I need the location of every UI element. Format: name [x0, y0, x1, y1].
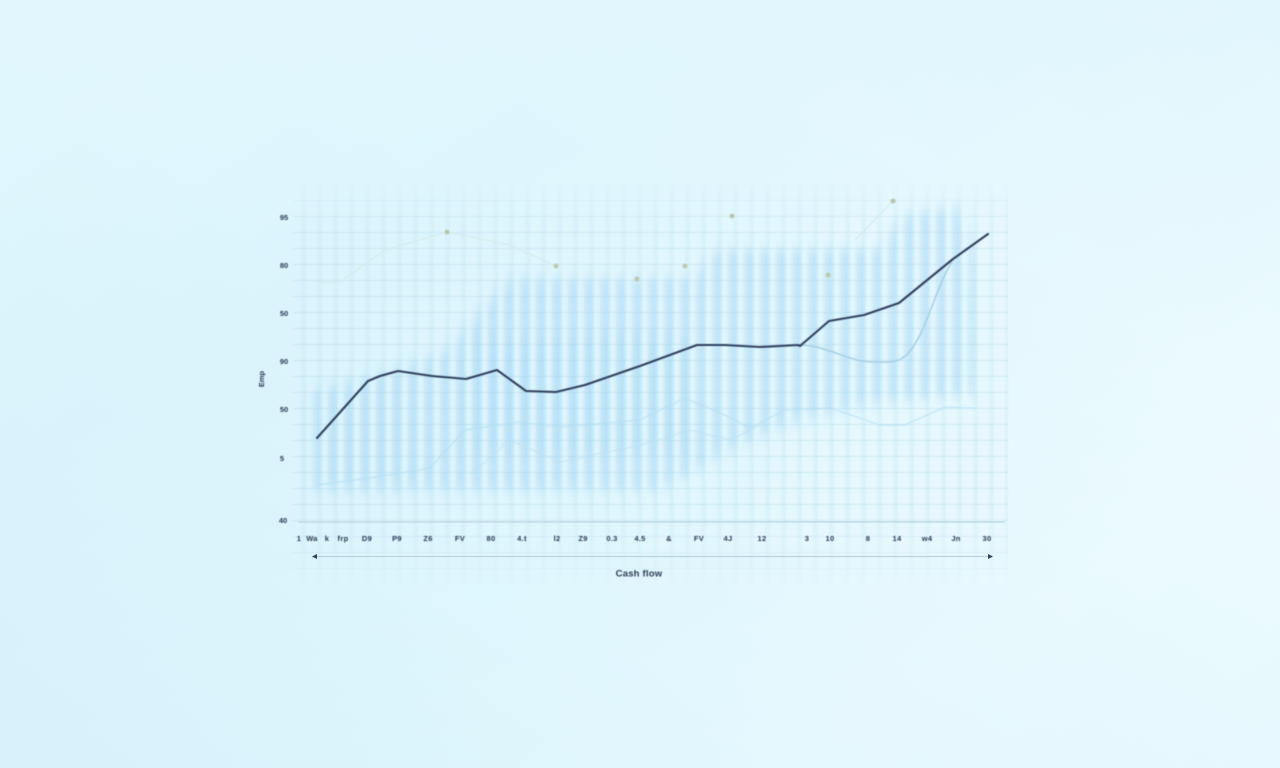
double-headed arrow — [312, 554, 993, 559]
main cash flow line — [317, 234, 988, 438]
y-axis labels: 95 — [280, 213, 288, 222]
x-axis labels: & — [666, 534, 672, 543]
x-axis labels: 30 — [983, 534, 991, 543]
x-axis labels: Z6 — [423, 534, 433, 543]
x-axis labels: 3 — [805, 534, 809, 543]
pale blue lower series — [317, 262, 975, 485]
y-axis labels: 40 — [279, 516, 287, 525]
x-axis labels: FV — [455, 534, 465, 543]
x-axis labels: 4J — [724, 534, 732, 543]
y-axis labels: 90 — [280, 357, 288, 366]
x-axis labels: 4.t — [517, 534, 527, 543]
x axis line — [298, 521, 1005, 523]
x-axis labels: Z9 — [578, 534, 588, 543]
line chart: cash flow — [258, 198, 1008, 578]
x-axis labels: k — [325, 534, 330, 543]
y-axis labels: 50 — [280, 309, 288, 318]
x-axis labels: P9 — [392, 534, 402, 543]
x-axis labels: 4.5 — [634, 534, 646, 543]
x-axis labels: Jn — [951, 534, 961, 543]
y-axis labels: 80 — [280, 261, 288, 270]
x-axis labels: 12 — [758, 534, 766, 543]
y-axis title: Emp — [257, 370, 266, 387]
x-axis labels: 80 — [487, 534, 495, 543]
x-axis labels: 14 — [893, 534, 902, 543]
x-axis labels: D9 — [362, 534, 372, 543]
x-axis labels: 8 — [866, 534, 870, 543]
y-axis labels: 5 — [280, 454, 284, 463]
x-axis labels: FV — [694, 534, 704, 543]
y-axis labels: 50 — [280, 405, 288, 414]
x-axis labels: 0.3 — [606, 534, 618, 543]
x-axis labels: w4 — [921, 534, 933, 543]
faint upper series with olive dots — [317, 199, 895, 282]
x-axis labels: frp — [338, 534, 349, 543]
grid — [294, 200, 1008, 554]
blue column bands — [312, 204, 976, 494]
y-axis labels — [279, 213, 288, 525]
x-axis labels: 1 — [297, 534, 301, 543]
x-axis title: Cash flow — [616, 568, 663, 580]
x-axis labels: l2 — [554, 534, 560, 543]
x-axis labels: 10 — [826, 534, 834, 543]
x-axis labels — [297, 534, 991, 543]
x-axis labels: Wa — [306, 534, 318, 543]
